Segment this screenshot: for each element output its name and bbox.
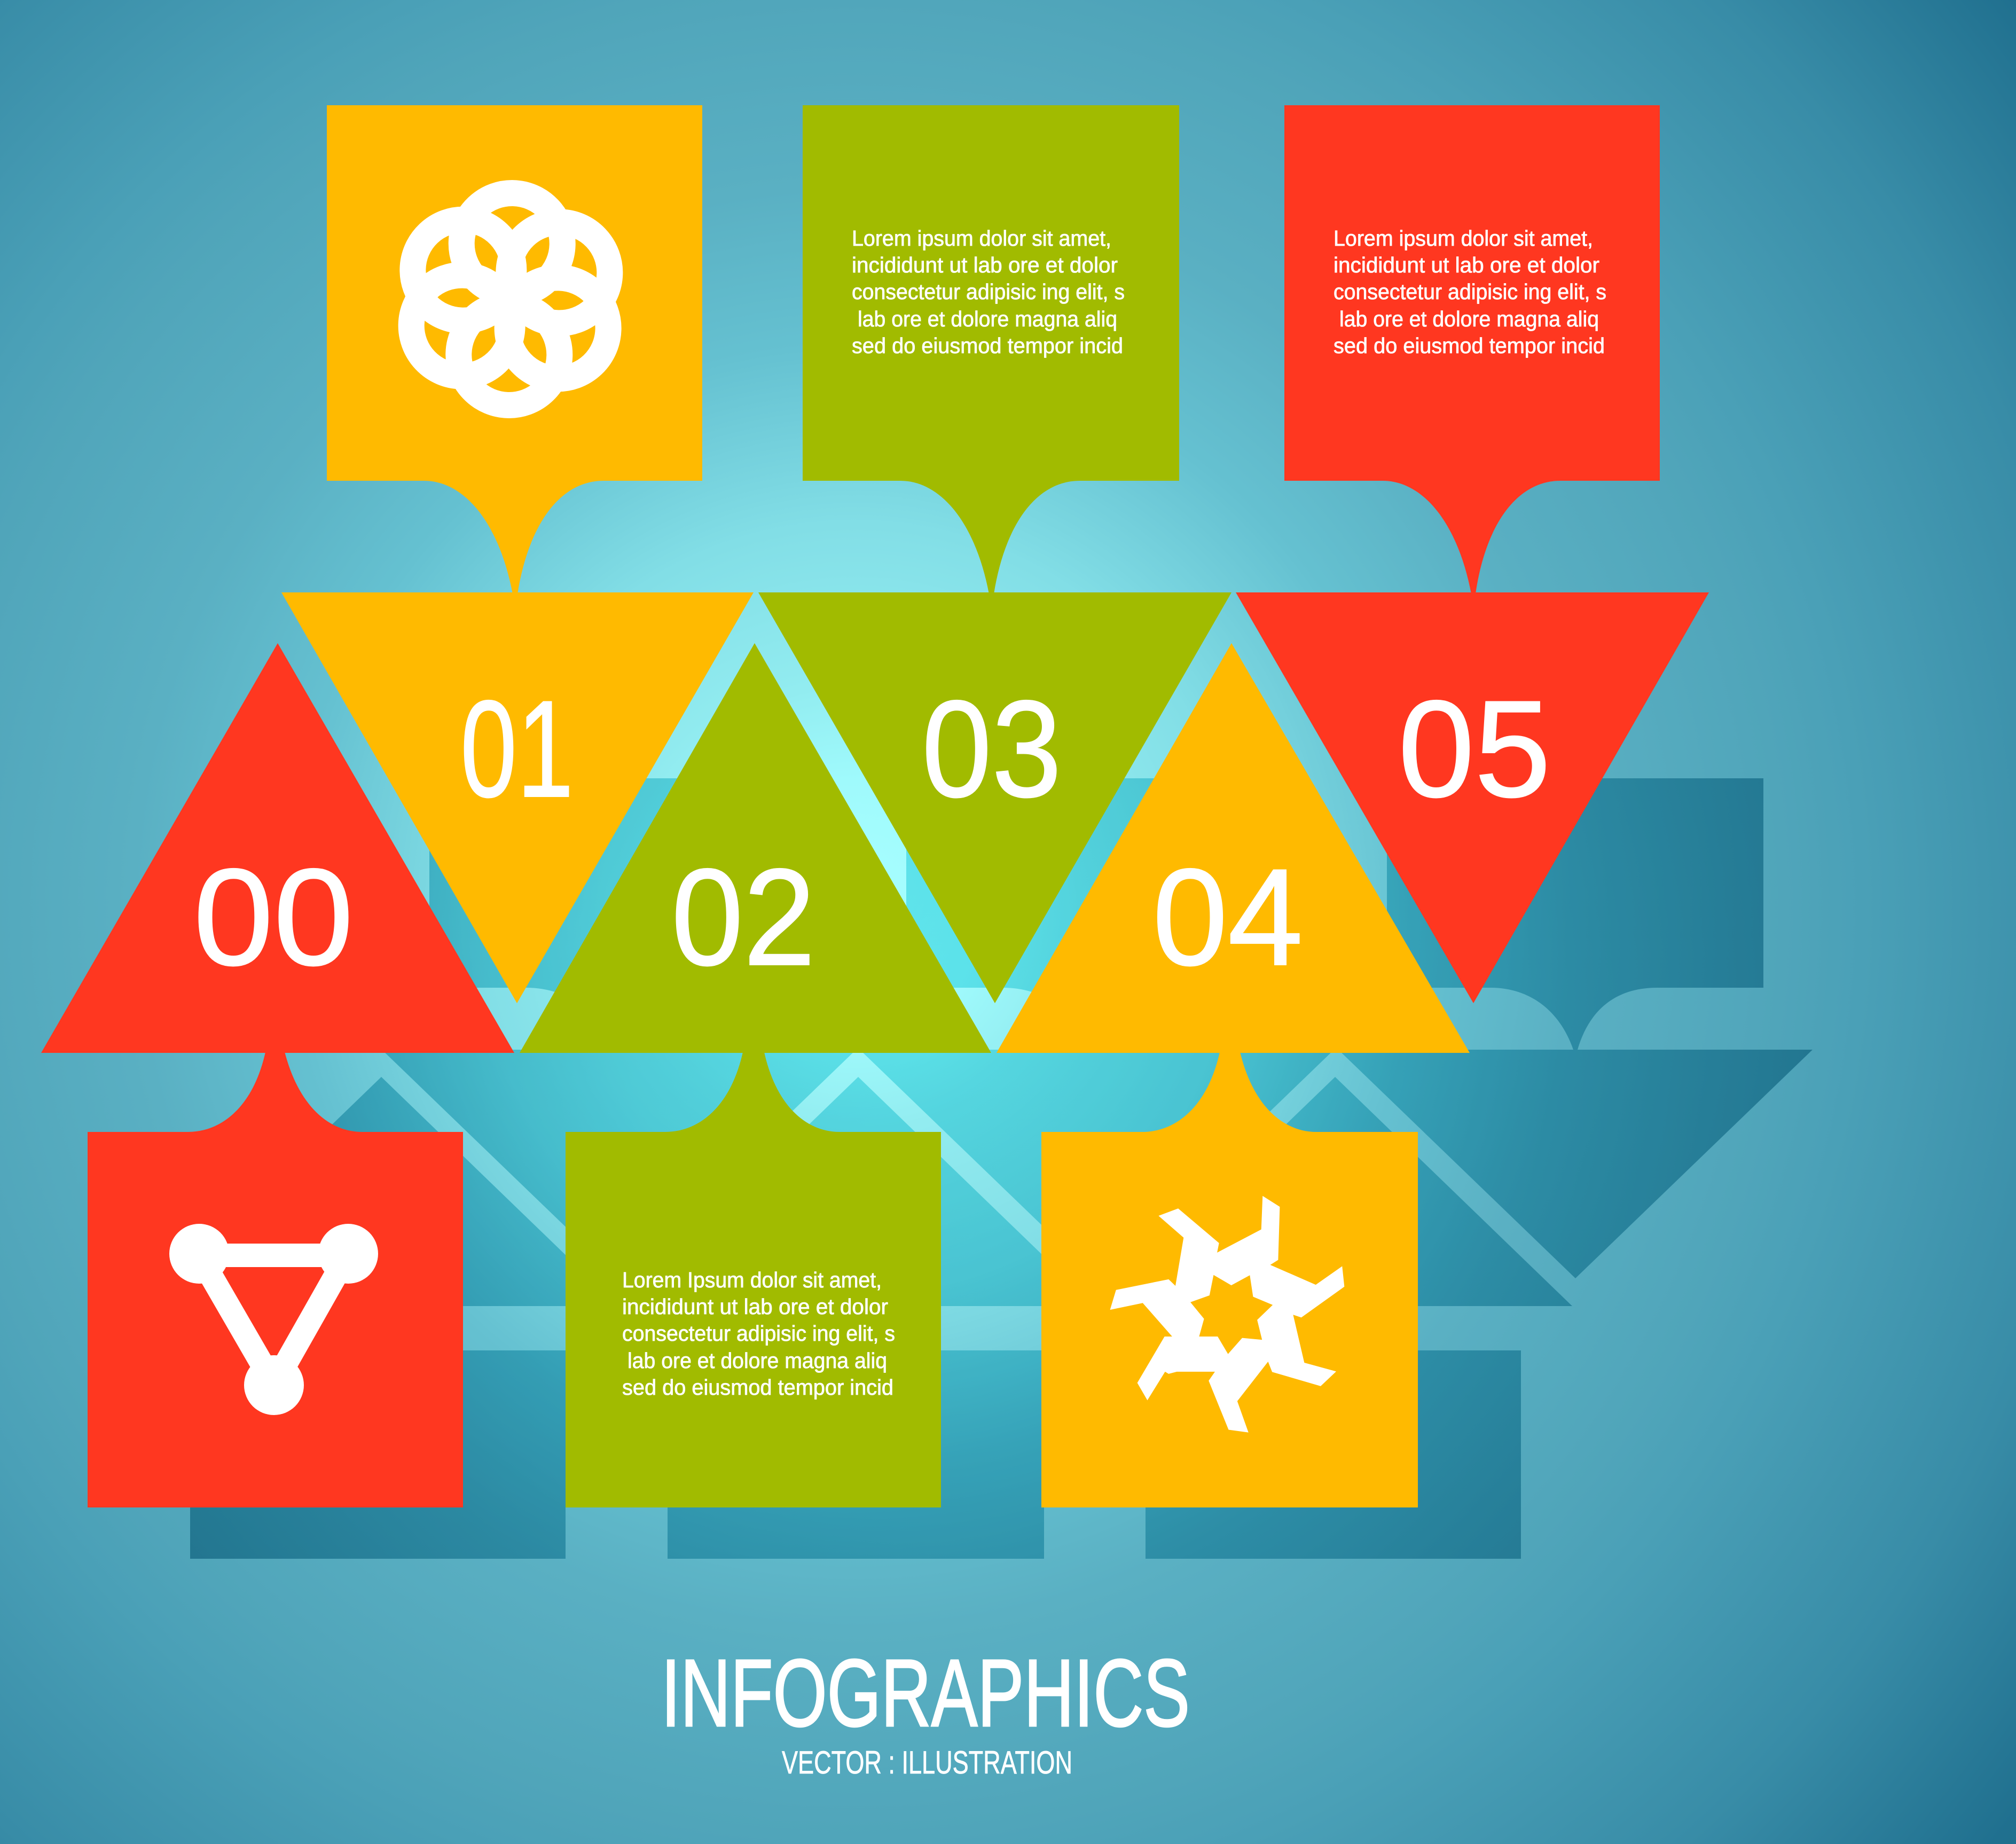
text block 05: sed do eiusmod tempor incid [1333,333,1605,358]
text block 05: incididunt ut lab ore et dolor [1333,253,1599,277]
text block 05: Lorem ipsum dolor sit amet, [1333,226,1593,251]
shadow: downward triangles [382,1050,1813,1278]
subtitle: VECTOR : ILLUSTRATION [782,1745,1072,1780]
triangle 04: yellow pointing up: 04 [1152,840,1303,994]
text block 05: lab ore et dolore magna aliq [1339,307,1599,331]
triangle 04: yellow pointing up [997,643,1470,1053]
panel 00: red callout box with triangle icon [88,1050,463,1507]
text block 02: sed do eiusmod tempor incid [622,1375,893,1400]
triangle 02: green pointing up: 02 [671,840,815,994]
shadow: upper squashed boxes and stems [429,778,1763,1050]
triangle 05: red pointing down: 05 [1398,671,1551,826]
triangle 02: green pointing up [520,643,991,1053]
triangle 05: red pointing down [1236,592,1709,1003]
icon: pinwheel star [1110,1196,1344,1433]
panel 04: yellow callout box with star icon [1041,1050,1418,1507]
triangle 03: green pointing down [758,592,1231,1003]
text block 02: consectetur adipisic ing elit, s [622,1321,895,1346]
triangle 00: red pointing up: 00 [193,840,354,994]
triangle 00: red pointing up [41,643,514,1053]
text block 02 [622,1268,895,1400]
icon: connected triangle [169,1224,378,1415]
text block 03: lab ore et dolore magna aliq [858,307,1117,331]
panel 02: green callout box with text [566,1050,941,1507]
text block 03: sed do eiusmod tempor incid [852,333,1123,358]
triangle 03: green pointing down: 03 [922,671,1062,826]
panel 01: yellow callout box with flower icon [327,105,702,594]
shadow: lower boxes [190,1350,1521,1559]
text block 02: incididunt ut lab ore et dolor [622,1294,888,1319]
triangle 01: yellow pointing down [281,592,754,1003]
triangle 01: yellow pointing down: 01 [460,671,574,826]
text block 03: Lorem ipsum dolor sit amet, [852,226,1111,251]
text block 03: consectetur adipisic ing elit, s [852,279,1125,304]
text block 02: lab ore et dolore magna aliq [627,1348,887,1373]
title: INFOGRAPHICS [661,1639,1190,1746]
text block 02: Lorem Ipsum dolor sit amet, [622,1268,882,1292]
text block 03: incididunt ut lab ore et dolor [852,253,1118,277]
text block 03 [852,226,1125,358]
panel 05: red callout box with text [1284,105,1660,594]
shadow: upward triangles [144,1077,1572,1306]
text block 05 [1333,226,1606,358]
icon: flower rosette [409,191,612,408]
panel 03: green callout box with text [803,105,1179,594]
text block 05: consectetur adipisic ing elit, s [1333,279,1606,304]
